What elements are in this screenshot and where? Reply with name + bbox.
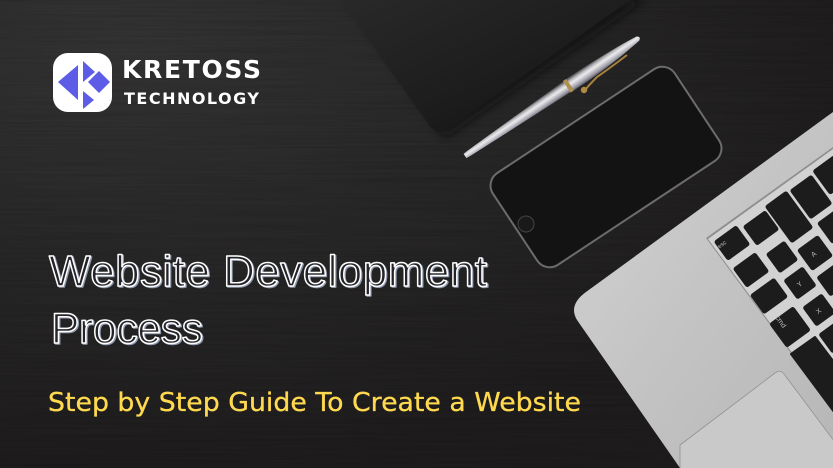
title outlined text: Website Development bbox=[49, 247, 487, 296]
logo wordmark bbox=[122, 55, 261, 108]
pen bbox=[461, 32, 644, 162]
key legends: A bbox=[810, 250, 818, 259]
pen clip bbox=[581, 55, 627, 93]
pen cap bbox=[566, 32, 644, 91]
notebook bbox=[340, 0, 645, 138]
title shadow bbox=[50, 248, 488, 354]
key legends: X bbox=[815, 307, 823, 316]
key legends: Y bbox=[796, 280, 804, 289]
key legends: cmd bbox=[773, 315, 787, 330]
phone home button bbox=[518, 216, 534, 232]
logo badge bbox=[53, 53, 112, 112]
title outlined text: Process bbox=[51, 306, 203, 353]
laptop bbox=[560, 100, 833, 468]
smartphone bbox=[485, 61, 727, 273]
logo wordmark: KRETOSS bbox=[122, 55, 261, 84]
pen gold band bbox=[563, 79, 574, 93]
logo wordmark: TECHNOLOGY bbox=[124, 89, 259, 108]
title shadow: Process bbox=[52, 307, 204, 354]
subtitle: Step by Step Guide To Create a Website bbox=[48, 388, 581, 418]
key legends: esc bbox=[717, 240, 728, 250]
title bbox=[49, 247, 488, 354]
pen barrel bbox=[461, 81, 571, 161]
logo bbox=[53, 53, 261, 112]
keyboard well bbox=[706, 147, 833, 353]
key legends bbox=[717, 240, 823, 330]
logo mark bbox=[58, 61, 110, 109]
title shadow: Website Development bbox=[50, 248, 488, 297]
title outlined text bbox=[49, 247, 487, 353]
keys bbox=[714, 155, 833, 420]
trackpad bbox=[680, 371, 833, 468]
